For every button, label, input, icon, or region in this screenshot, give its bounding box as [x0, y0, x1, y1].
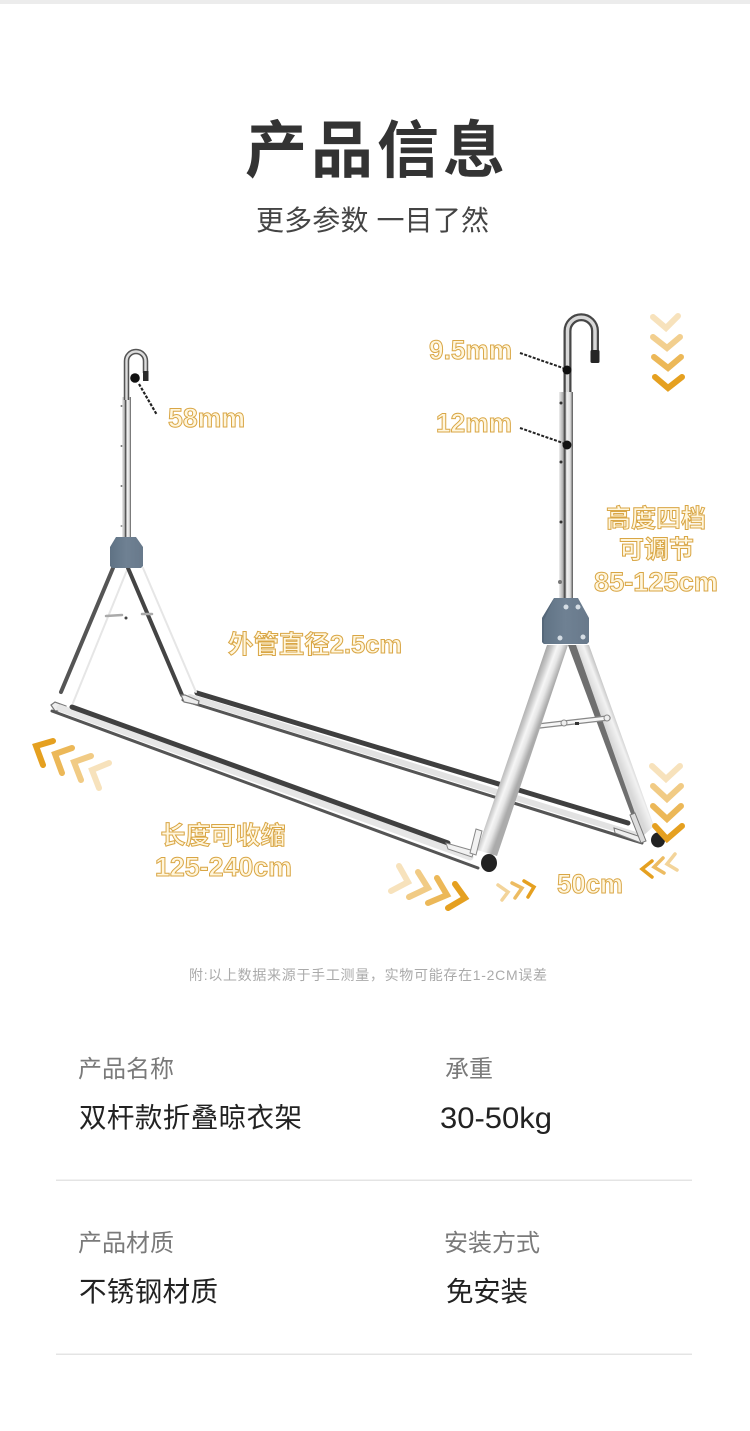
measurement marker: 58mm: [130, 373, 157, 415]
spec: installation: 安装方式: [444, 1230, 540, 1257]
spec: load capacity: 30-50kg: [440, 1102, 552, 1135]
arrows: small right of 50cm span: [498, 881, 534, 900]
arrows: left pointing outward: [36, 741, 109, 788]
arrows: bottom pointing right: [391, 866, 465, 908]
label: height adjustable: 可调节: [619, 536, 694, 564]
right back leg: [568, 645, 654, 836]
footnote: 附:以上数据来源于手工测量，实物可能存在1-2CM误差: [189, 967, 547, 983]
label: 58mm: 58mm: [168, 403, 245, 433]
arrows: small left of 50cm span: [642, 854, 677, 877]
arrows: top right pointing down: [653, 316, 682, 388]
left pole and hook: [120, 352, 148, 537]
spec: product name: [78, 1056, 302, 1133]
right hinge brackets and rubber feet: [446, 813, 665, 872]
label: length retractable: [155, 822, 292, 882]
divider: [56, 1354, 692, 1355]
divider: [56, 1180, 692, 1181]
label: 50cm: 50cm: [557, 869, 623, 899]
spec: product name: 双杆款折叠晾衣架: [79, 1102, 302, 1133]
label: length retractable: 125-240cm: [155, 852, 292, 882]
label: height adjustable: [594, 505, 718, 597]
title: 产品信息: [245, 117, 505, 186]
spec: load capacity: 承重: [445, 1056, 493, 1083]
top edge strip: [0, 0, 750, 4]
left A-frame legs: [61, 568, 196, 703]
back floor bar: [183, 693, 642, 843]
left connector block: [110, 537, 143, 568]
measurement marker: 9.5mm: [520, 353, 572, 374]
right cross brace: [527, 715, 610, 730]
spec: material: 不锈钢材质: [79, 1276, 218, 1307]
label: length retractable: 长度可收缩: [160, 822, 286, 850]
spec: product name: 产品名称: [78, 1056, 174, 1083]
spec: material: [78, 1230, 218, 1307]
right connector block: [542, 598, 589, 644]
measurement marker: 12mm: [520, 428, 572, 450]
label: height adjustable: 85-125cm: [594, 567, 718, 597]
label: outer tube diameter: 外管直径2.5cm: [228, 631, 402, 659]
label: 9.5mm: 9.5mm: [429, 335, 512, 365]
right pole and hook: [558, 317, 600, 600]
right front leg: [477, 645, 568, 856]
spec: load capacity: [440, 1056, 552, 1135]
subtitle: 更多参数 一目了然: [256, 205, 489, 236]
label: 12mm: 12mm: [436, 408, 512, 438]
spec: installation: [444, 1230, 540, 1307]
label: height adjustable: 高度四档: [606, 505, 706, 533]
drying rack illustration: [51, 317, 665, 872]
left hinge brackets: [51, 695, 199, 711]
arrows: lower right pointing down: [652, 766, 682, 839]
spec: installation: 免安装: [446, 1276, 528, 1307]
spec: material: 产品材质: [78, 1230, 174, 1257]
front floor bar: [52, 707, 478, 868]
